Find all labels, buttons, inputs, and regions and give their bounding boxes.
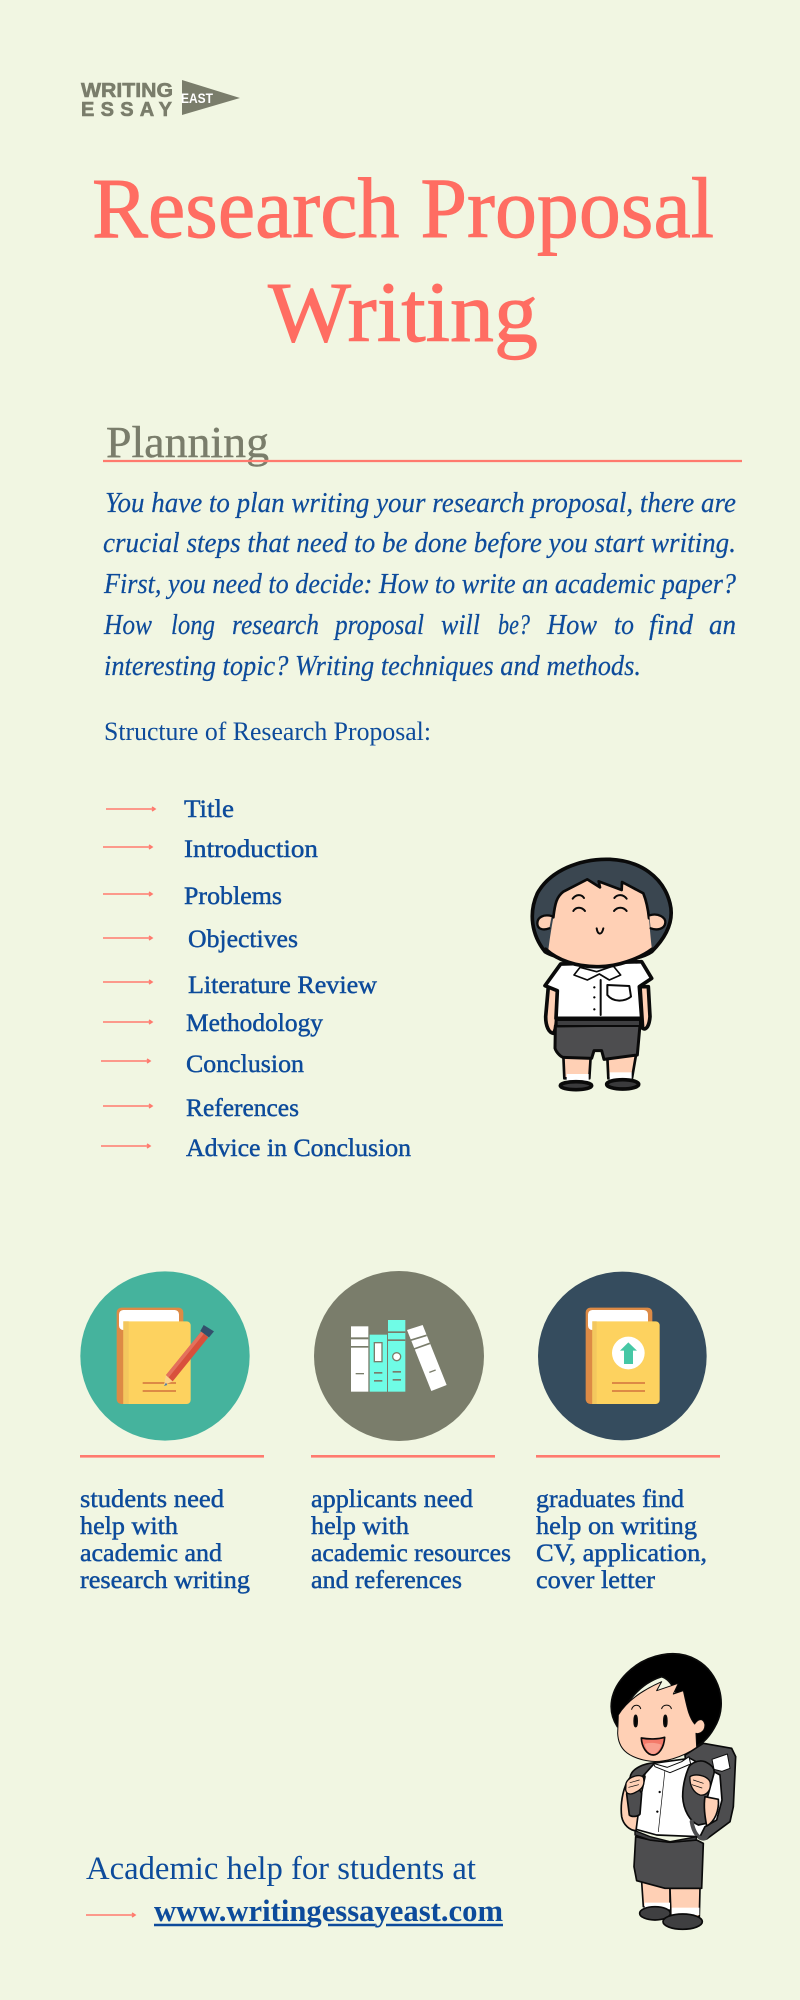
- divider and caption: help with: [80, 1513, 179, 1540]
- intro paragraph: How: [103, 609, 153, 641]
- panel: students: [80, 1271, 264, 1594]
- logo: Writing Essay East: ESSAY: [81, 99, 173, 121]
- item: Conclusion: [101, 1051, 305, 1078]
- divider and caption: applicants need: [311, 1486, 474, 1513]
- intro paragraph: find: [649, 609, 693, 641]
- item: Objectives: Objectives: [188, 926, 298, 953]
- item: Conclusion: Conclusion: [186, 1051, 305, 1078]
- panel: graduates: [536, 1272, 720, 1594]
- divider and caption: graduates find: [536, 1486, 685, 1513]
- item: References: [103, 1095, 299, 1122]
- item: Methodology: Methodology: [186, 1010, 324, 1037]
- icon: books: [314, 1271, 484, 1441]
- title: Writing: [268, 264, 538, 360]
- divider and caption: help with: [311, 1513, 410, 1540]
- list: structure items: [101, 796, 412, 1162]
- divider and caption: [536, 1455, 720, 1594]
- logo: Writing Essay East: [81, 80, 240, 121]
- logo: Writing Essay East: EAST: [181, 91, 214, 106]
- intro paragraph: be?: [498, 609, 530, 641]
- intro paragraph: First, you need to decide: How to write an academic paper?: [103, 568, 736, 600]
- item: Advice in Conclusion: Advice in Conclusion: [186, 1135, 412, 1162]
- divider and caption: research writing: [80, 1567, 251, 1594]
- icon: notebook and pencil: [80, 1271, 250, 1441]
- panel: applicants: [311, 1271, 511, 1594]
- item: Literature Review: [103, 972, 377, 999]
- divider and caption: [80, 1455, 264, 1594]
- intro paragraph: How: [546, 609, 598, 641]
- item: Introduction: Introduction: [184, 836, 319, 863]
- intro paragraph: an: [709, 609, 736, 641]
- intro paragraph: interesting topic? Writing techniques and methods.: [104, 650, 641, 682]
- heading: Planning: Planning: [106, 418, 269, 467]
- title: Research Proposal: [92, 160, 714, 256]
- item: References: References: [186, 1095, 299, 1122]
- item: Title: [106, 796, 234, 823]
- intro paragraph: long: [171, 609, 215, 641]
- logo: Writing Essay East: WRITING: [81, 80, 173, 102]
- icon: book with upload arrow: [538, 1272, 707, 1440]
- divider and caption: students need: [80, 1486, 225, 1513]
- illustration: student with backpack: [611, 1654, 736, 1929]
- divider and caption: academic resources: [311, 1540, 511, 1567]
- divider and caption: help on writing: [536, 1513, 698, 1540]
- divider and caption: academic and: [80, 1540, 223, 1567]
- item: Title: Title: [184, 796, 234, 823]
- intro paragraph: proposal: [333, 609, 424, 641]
- footer call to action: [86, 1851, 503, 1928]
- divider and caption: [311, 1455, 511, 1594]
- illustration: smiling student: [532, 859, 671, 1090]
- item: Introduction: [103, 836, 319, 863]
- divider and caption: cover letter: [536, 1567, 656, 1594]
- item: Methodology: [103, 1010, 324, 1037]
- footer call to action: www.writingessayeast.com: [154, 1893, 503, 1928]
- item: Problems: [103, 883, 282, 910]
- divider and caption: CV, application,: [536, 1540, 707, 1567]
- footer call to action: Academic help for students at: [86, 1851, 476, 1887]
- intro paragraph: to: [614, 609, 634, 641]
- intro paragraph: crucial steps that need to be done before you start writing.: [103, 527, 736, 559]
- item: Objectives: [103, 926, 298, 953]
- intro paragraph: You have to plan writing your research proposal, there are: [105, 487, 736, 519]
- divider and caption: and references: [311, 1567, 462, 1594]
- intro paragraph: [103, 487, 736, 682]
- item: Problems: Problems: [184, 883, 282, 910]
- title: [92, 160, 714, 360]
- intro paragraph: will: [441, 609, 480, 641]
- subheading: structure: Structure of Research Proposal:: [104, 717, 431, 746]
- item: Literature Review: Literature Review: [188, 972, 377, 999]
- intro paragraph: research: [232, 609, 319, 641]
